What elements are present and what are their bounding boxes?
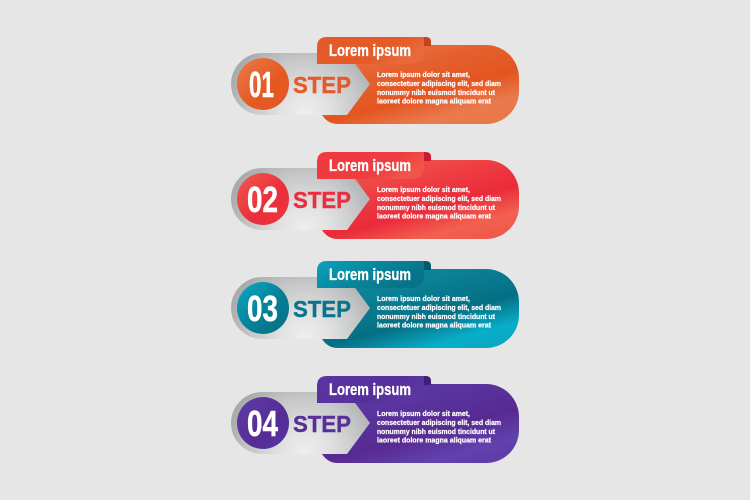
description [377,411,501,444]
step label: STEP [293,72,351,98]
tab fold [420,37,431,46]
description: nonummy nibh euismod tincidunt ut [377,429,496,436]
main panel [322,269,519,348]
description: laoreet dolore magna aliquam erat [377,98,492,106]
tab fold [420,376,431,385]
tab fold [420,152,431,161]
description: consectetuer adipiscing elit, sed diam [377,305,501,312]
step label: STEP [293,296,351,322]
tab title: Lorem ipsum [329,157,411,175]
description: consectetuer adipiscing elit, sed diam [377,81,501,88]
grey arrow pill [231,277,370,339]
description: nonummy nibh euismod tincidunt ut [377,314,496,321]
tab title: Lorem ipsum [329,381,411,399]
step label: STEP [293,187,351,213]
grey arrow pill [231,168,370,230]
number circle [237,282,289,334]
description: laoreet dolore magna aliquam erat [377,438,492,444]
step 3 [231,261,519,348]
tab [317,152,424,179]
description: Lorem ipsum dolor sit amet, [377,411,470,418]
number circle [237,397,289,449]
number circle [237,173,289,225]
main panel [322,160,519,239]
main panel [322,45,519,124]
number: 04 [247,403,278,444]
step 4 [231,376,519,463]
tab [317,376,424,403]
description: nonummy nibh euismod tincidunt ut [377,205,496,212]
description: Lorem ipsum dolor sit amet, [377,72,470,79]
number circle [237,58,289,110]
description: consectetuer adipiscing elit, sed diam [377,420,501,427]
tab title: Lorem ipsum [329,266,411,284]
description: laoreet dolore magna aliquam erat [377,214,492,220]
grey arrow pill [231,392,370,454]
number: 03 [247,288,278,329]
number: 02 [247,179,278,220]
description: laoreet dolore magna aliquam erat [377,322,492,330]
tab fold [420,261,431,270]
tab [317,261,424,288]
description [377,296,501,330]
main panel [322,384,519,463]
description: consectetuer adipiscing elit, sed diam [377,196,501,203]
number: 01 [249,64,274,105]
description: nonummy nibh euismod tincidunt ut [377,90,496,97]
tab [317,37,424,64]
step label: STEP [293,411,351,437]
step 1 [231,37,519,124]
description [377,72,501,106]
tab title: Lorem ipsum [329,42,411,60]
description: Lorem ipsum dolor sit amet, [377,296,470,303]
grey arrow pill [231,53,370,115]
description: Lorem ipsum dolor sit amet, [377,187,470,194]
description [377,187,501,220]
step 2 [231,152,519,239]
